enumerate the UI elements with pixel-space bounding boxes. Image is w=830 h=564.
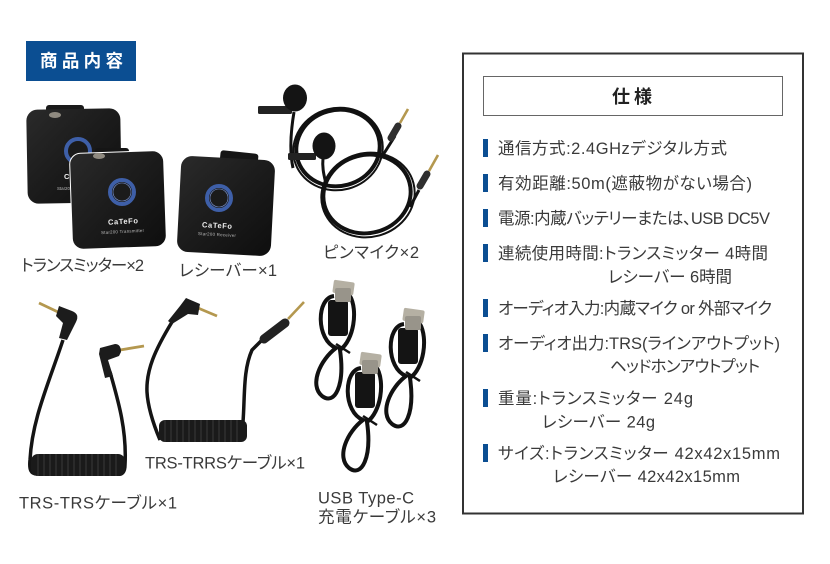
badge: 商品内容: 商品内容 (40, 51, 124, 71)
product: receiver: Star200 Receiver (198, 231, 237, 238)
device: rear transmitter: C (64, 172, 70, 181)
right-angle plug side (99, 344, 144, 378)
coil (159, 420, 247, 442)
label: pin mic: ピンマイク×2 (323, 243, 419, 262)
spec: size (483, 444, 780, 486)
label: transmitter: トランスミッター×2 (21, 256, 144, 275)
spec: weight: 重量:トランスミッター 24g (498, 389, 693, 408)
product: pin microphones (258, 84, 438, 248)
spec: audio output: ヘッドホンアウトプット (610, 357, 760, 376)
device: rear transmitter: Star20 (57, 186, 70, 191)
spec: audio output (483, 333, 780, 376)
product: receiver: CaTeFo (202, 220, 233, 231)
spec: weight: レシーバー 24g (542, 414, 655, 432)
coil (31, 454, 125, 476)
device: front transmitter: Star200 Transmitter (101, 228, 145, 235)
panel: specifications (463, 54, 803, 514)
spec: power: 電源:内蔵バッテリーまたは、USB DC5V (498, 209, 770, 228)
device: front transmitter: CaTeFo (108, 216, 139, 227)
product: TRS-TRRS cable (147, 298, 304, 442)
usb cable 2 (343, 352, 382, 470)
label: USB Type-C: 充電ケーブル×3 (318, 506, 436, 526)
right-angle plug (168, 298, 217, 324)
heading: 仕様: 仕様 (612, 87, 652, 107)
spec: continuous use time: 連続使用時間:トランスミッター 4時間 (498, 244, 768, 263)
label: receiver: レシーバー×1 (179, 262, 277, 280)
spec: continuous use time (483, 244, 768, 286)
product: TRS-TRS cable (30, 303, 144, 476)
straight plug (264, 302, 304, 339)
label: USB Type-C: USB Type-C (318, 490, 414, 508)
usb cable 1 (316, 280, 355, 398)
right-angle plug top (39, 303, 77, 340)
wires (30, 340, 125, 474)
heading: 仕様 (484, 76, 782, 116)
cable coil 2 (312, 142, 424, 248)
cable coil 1 (284, 98, 395, 200)
plug 1 (391, 109, 408, 138)
plug 2 (420, 155, 438, 186)
product: transmitters (26, 105, 167, 250)
spec: size: レシーバー 42x42x15mm (553, 468, 740, 486)
device: rear transmitter (26, 105, 122, 204)
product: USB Type-C cables (316, 280, 425, 470)
product: receiver (177, 150, 275, 256)
spec: continuous use time: レシーバー 6時間 (608, 268, 732, 286)
wires (147, 322, 262, 440)
microphone head 2 with clip (288, 132, 336, 160)
label: TRS-TRRS: TRS-TRRSケーブル×1 (145, 452, 305, 472)
spec: range: 有効距離:50m(遮蔽物がない場合) (498, 174, 752, 193)
device: front transmitter (69, 148, 167, 250)
label: USB Type-C (318, 490, 436, 526)
spec: audio output: オーディオ出力:TRS(ラインアウトプット) (498, 333, 780, 353)
spec: audio input: オーディオ入力:内蔵マイク or 外部マイク (498, 298, 772, 318)
spec: communication: 通信方式:2.4GHzデジタル方式 (498, 138, 727, 158)
microphone head 1 with clip (258, 84, 307, 114)
usb cable 3 (386, 308, 425, 426)
label: TRS-TRS: TRS-TRSケーブル×1 (19, 492, 177, 512)
badge: 商品内容 (26, 41, 136, 81)
spec: weight (483, 389, 693, 432)
spec: size: サイズ:トランスミッター 42x42x15mm (498, 444, 780, 463)
